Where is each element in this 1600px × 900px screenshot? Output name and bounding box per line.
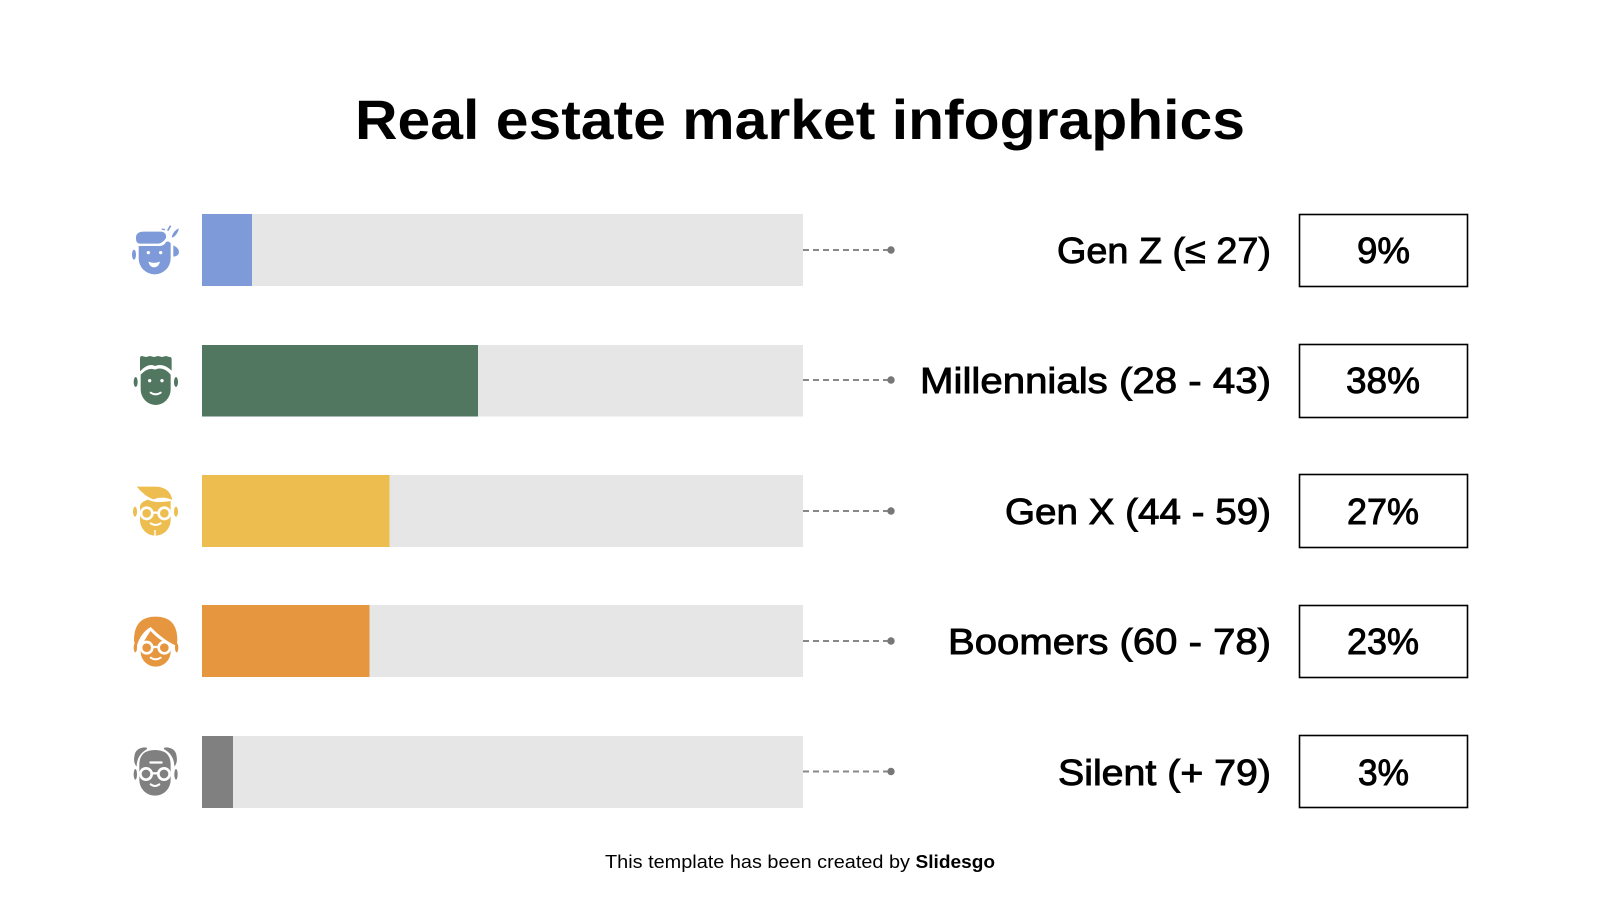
label: Boomers (60 - 78) [948, 621, 1271, 662]
value box [1300, 474, 1468, 548]
track bar [202, 214, 803, 286]
footer credit: Slidesgo [916, 852, 995, 872]
track bar [202, 475, 803, 547]
row: Gen X [133, 474, 1468, 548]
value box [1300, 606, 1468, 678]
label: Gen X (44 - 59) [1005, 491, 1271, 532]
label: Silent (+ 79) [1058, 752, 1271, 793]
row: Boomers [134, 605, 1468, 678]
track bar [202, 345, 803, 416]
value bar 9% [202, 214, 252, 286]
value box [1300, 214, 1468, 286]
icon: Boomer face [134, 617, 178, 667]
icon: Millennial face [134, 356, 178, 405]
value box: 3% [1358, 752, 1409, 793]
row: Millennials [134, 344, 1468, 418]
track bar [202, 605, 803, 677]
label: Millennials (28 - 43) [920, 360, 1271, 401]
row: Gen Z [132, 214, 1468, 286]
connector [803, 246, 895, 254]
connector [803, 507, 895, 515]
value box [1300, 344, 1468, 418]
value box: 27% [1347, 491, 1419, 532]
label: Gen Z (≤ 27) [1057, 230, 1271, 271]
value box [1300, 736, 1468, 808]
connector [803, 637, 895, 645]
value box: 23% [1347, 621, 1419, 662]
row: Silent [134, 736, 1468, 808]
value bar 3% [202, 736, 233, 808]
icon: Silent face [134, 747, 178, 796]
title: Real estate market infographics [355, 88, 1245, 151]
connector [803, 376, 895, 384]
icon: Gen X face [133, 487, 178, 536]
value bar 27% [202, 475, 390, 547]
value box: 38% [1346, 360, 1420, 401]
connector [803, 768, 895, 775]
value bar 38% [202, 345, 478, 416]
icon: Gen Z face [132, 226, 179, 274]
footer credit: This template has been created by [605, 852, 910, 872]
value bar 23% [202, 605, 370, 677]
value box: 9% [1357, 230, 1410, 271]
track bar [202, 736, 803, 808]
